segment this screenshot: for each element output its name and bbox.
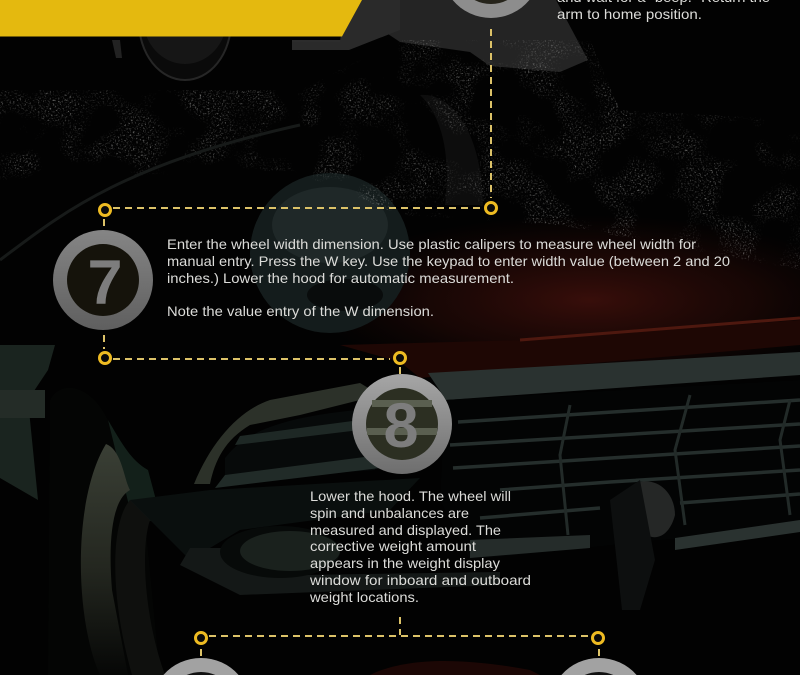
node: right lower xyxy=(592,632,604,644)
background: mud ground xyxy=(0,40,800,270)
text: step 8 instructions: Lower the hood. The wheel will xyxy=(310,489,511,504)
text: step 8 instructions: weight locations. xyxy=(309,590,419,605)
node: bottom of step 7 xyxy=(100,352,110,364)
connector: horizontal dashed line above step 8 xyxy=(113,358,390,360)
node: top left of step 7 link xyxy=(100,204,110,216)
text: step 7 instructions xyxy=(167,237,730,319)
node: top of step 8 xyxy=(394,352,406,364)
background: red car edge xyxy=(520,318,800,340)
text: step 7 instructions: Note the value entry of the W dimension. xyxy=(167,304,434,319)
text: step 6 ending xyxy=(557,0,770,22)
text: step 8 instructions: measured and displayed. The xyxy=(310,523,501,538)
connector: tick above step 7 xyxy=(103,219,105,226)
badge: lower left partial xyxy=(163,658,239,675)
connector: horizontal dashed line below step 8 xyxy=(209,635,590,637)
node: top right of step 7 link xyxy=(486,202,496,214)
text: step 7 instructions: manual entry. Press the W key. Use the keypad to enter width value (between 2 and 20 xyxy=(167,254,730,269)
number 7: 7 xyxy=(87,248,123,318)
number 8: 8 xyxy=(383,391,419,461)
connector: tick above step 8 xyxy=(399,367,401,374)
background: headlight lens xyxy=(250,173,410,333)
badge: step 7 xyxy=(53,230,153,330)
badge: lower right partial xyxy=(561,658,637,675)
connector: tick below step 7 xyxy=(103,335,105,349)
background: classic car hood curve xyxy=(0,125,300,260)
connector: vertical dashed line from step 6 xyxy=(490,29,492,198)
banner: yellow title band xyxy=(0,0,362,36)
background: left car side xyxy=(0,345,165,675)
text: step 8 instructions: spin and unbalances are xyxy=(310,506,469,521)
background: grille xyxy=(428,352,800,610)
background: red glow xyxy=(310,215,800,385)
background: upper truck body xyxy=(112,0,588,205)
text: step 7 instructions: inches.) Lower the hood for automatic measurement. xyxy=(167,271,514,286)
background: truck tire xyxy=(139,0,231,80)
background: classic car front xyxy=(130,383,540,675)
node: left lower xyxy=(196,632,206,644)
text: step 8 instructions: window for inboard and outboard xyxy=(309,573,531,588)
badge: step 6 partial xyxy=(453,0,529,18)
connector: horizontal dashed line above step 7 xyxy=(113,207,482,209)
text: step 8 instructions xyxy=(309,489,531,605)
text: step 8 instructions: corrective weight amount xyxy=(310,539,476,554)
badge: step 8 xyxy=(352,374,452,474)
background: red car body xyxy=(340,320,800,378)
connector: tick below step 8 text xyxy=(399,617,401,635)
text: step 8 instructions: appears in the weight display xyxy=(310,556,500,571)
connector: tick left lower badge xyxy=(200,649,202,656)
text: step 7 instructions: Enter the wheel width dimension. Use plastic calipers to measure wheel width for xyxy=(167,237,697,252)
connector: tick right lower badge xyxy=(598,649,600,656)
text: step 6 ending: arm to home position. xyxy=(557,7,702,22)
